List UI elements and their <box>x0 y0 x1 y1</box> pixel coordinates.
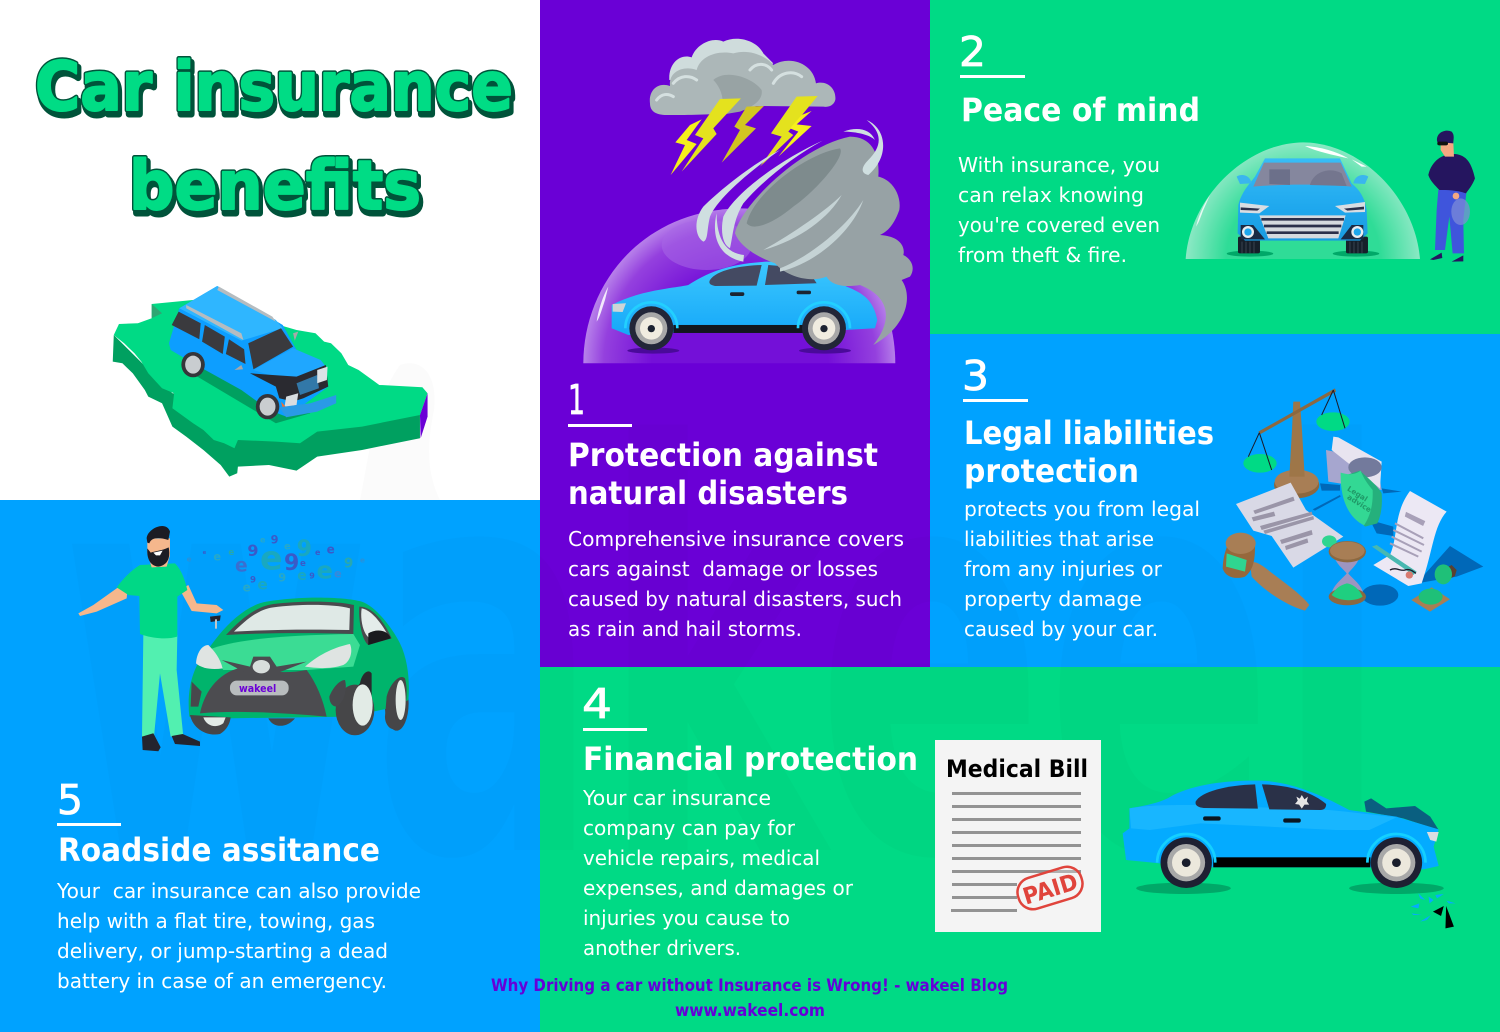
illustration: legal objects: Legal <box>1346 484 1369 504</box>
panel 3: legal liabilities <box>962 352 1483 641</box>
letter cloud: e <box>243 580 251 594</box>
body <box>1123 781 1439 869</box>
title: Car insurance <box>37 52 515 131</box>
letter cloud: 9 <box>250 576 256 586</box>
footer link text: Why Driving a car without Insurance is Wrong! - wakeel Blog <box>491 976 1008 996</box>
windows <box>172 312 245 364</box>
body text <box>582 786 854 960</box>
footer link text <box>491 976 1008 1021</box>
torso <box>117 563 187 638</box>
title: benefits <box>129 147 421 226</box>
letter cloud: e <box>187 555 192 564</box>
illustration: legal objects <box>1223 388 1483 612</box>
illustration: man with keys and green car: wakeel <box>239 682 276 695</box>
letter cloud: e <box>300 559 306 569</box>
body text: company can pay for <box>583 816 796 840</box>
body text: expenses, and damages or <box>583 876 854 900</box>
shadows <box>1227 251 1273 257</box>
heading: Protection against <box>568 436 878 474</box>
number 2: 2 <box>959 28 986 76</box>
body text: Your car insurance can also provide <box>56 879 421 903</box>
body text: you're covered even <box>958 213 1160 237</box>
man legs <box>142 635 183 737</box>
illustration: man with keys and green car <box>78 526 409 751</box>
illustration: storm, tornado and protected car <box>583 39 913 363</box>
heading <box>568 436 878 512</box>
map side <box>113 335 420 477</box>
heading: protection <box>964 452 1139 490</box>
heading: Legal liabilities <box>964 414 1214 452</box>
side window <box>359 607 392 645</box>
footer link text: www.wakeel.com <box>675 1001 825 1021</box>
letter cloud: 9 <box>278 571 286 585</box>
letter cloud: e <box>213 550 221 564</box>
letter cloud: 9 <box>284 551 299 576</box>
body text: from any injuries or <box>964 557 1163 581</box>
grille <box>1259 215 1346 238</box>
body text: as rain and hail storms. <box>568 617 802 641</box>
letter cloud: 9 <box>271 532 279 546</box>
body text: vehicle repairs, medical <box>583 846 820 870</box>
car wheels behind body <box>336 678 374 735</box>
heading: Peace of mind <box>961 91 1200 129</box>
body text: delivery, or jump-starting a dead <box>57 939 388 963</box>
body text: can relax knowing <box>958 183 1144 207</box>
car <box>189 598 409 718</box>
headlights <box>196 645 223 669</box>
title: benefits <box>131 151 423 230</box>
number 4: 4 <box>582 680 612 728</box>
letter cloud: 9 <box>309 571 315 580</box>
cloud <box>650 39 835 115</box>
letter cloud: e <box>257 575 268 593</box>
body text <box>56 879 421 993</box>
illustration: car under dome and thief <box>1186 131 1475 262</box>
book <box>1326 450 1382 490</box>
body text: caused by your car. <box>964 617 1158 641</box>
tornado <box>735 137 913 345</box>
illustration: damaged blue car <box>1123 781 1456 928</box>
stamp <box>1436 565 1457 583</box>
letter cloud: e <box>315 548 321 557</box>
letter cloud: 9 <box>297 537 312 562</box>
body text: cars against damage or losses <box>568 557 878 581</box>
heading <box>964 414 1214 490</box>
mirrors <box>234 332 298 370</box>
hourglass <box>1332 550 1363 597</box>
scales <box>1274 472 1319 498</box>
car <box>612 262 877 335</box>
heading: Roadside assitance <box>58 831 380 869</box>
contract <box>1236 483 1343 568</box>
heading: Financial protection <box>583 740 918 778</box>
letter cloud: e <box>228 548 234 558</box>
letter cloud: e <box>260 538 283 577</box>
body text: liabilities that arise <box>964 527 1154 551</box>
letter <box>1373 491 1447 586</box>
crushed hood <box>1364 798 1439 830</box>
panel 1: natural disasters <box>568 39 913 641</box>
faint watermark stem <box>360 363 440 500</box>
gavel <box>1250 562 1309 611</box>
lightning bolts <box>671 96 818 175</box>
wheels <box>629 306 673 350</box>
icon: Saudi map with crashed SUV <box>113 286 428 477</box>
letter cloud: e <box>327 542 335 556</box>
wheels <box>1161 837 1212 888</box>
dome <box>1186 142 1420 259</box>
arms <box>78 582 128 616</box>
letter cloud: e <box>203 550 207 556</box>
map end <box>420 393 428 438</box>
paid stamp: PAID <box>1020 869 1081 911</box>
wind streaks <box>696 150 780 242</box>
medical bill document: Medical Bill <box>946 755 1088 783</box>
letter cloud: e <box>334 566 342 580</box>
medical bill document <box>935 740 1101 932</box>
thief <box>1428 131 1475 262</box>
number 5: 5 <box>57 776 83 824</box>
panel 5: roadside assistance <box>56 526 421 993</box>
body text: battery in case of an emergency. <box>57 969 387 993</box>
broken glass <box>1433 906 1454 928</box>
dome <box>583 208 895 363</box>
number 1: 1 <box>568 376 585 424</box>
letter cloud: e <box>360 556 365 565</box>
title: Car insurance <box>35 48 513 127</box>
letter cloud <box>187 532 365 594</box>
body text: With insurance, you <box>958 153 1160 177</box>
shield <box>1342 471 1382 527</box>
letter cloud: e <box>317 556 333 584</box>
title: benefits <box>129 147 421 226</box>
grille <box>200 667 327 717</box>
letter cloud: e <box>235 556 248 577</box>
hood <box>253 348 326 377</box>
tyres <box>1238 237 1368 253</box>
front wheels <box>190 715 231 735</box>
panel: title and map <box>35 48 515 500</box>
body text: caused by natural disasters, such <box>568 587 902 611</box>
windshield <box>226 602 354 635</box>
SUV body <box>169 286 328 417</box>
title <box>35 48 515 230</box>
letter cloud: e <box>284 541 291 552</box>
body text <box>958 153 1160 267</box>
body text: injuries you cause to <box>583 906 790 930</box>
title: Car insurance <box>35 48 513 127</box>
letter cloud: 9 <box>344 556 353 571</box>
body text <box>568 527 904 641</box>
keys <box>210 615 221 622</box>
panel 4: financial protection <box>582 680 1456 960</box>
body text: another drivers. <box>583 936 741 960</box>
letter cloud: e <box>297 568 307 584</box>
body <box>1238 158 1368 241</box>
body text: protects you from legal <box>964 497 1200 521</box>
body text <box>964 497 1200 641</box>
body text: Your car insurance <box>582 786 771 810</box>
body text: from theft & fire. <box>958 243 1127 267</box>
letter cloud: e <box>260 536 266 545</box>
car shadow <box>186 363 310 423</box>
body text: help with a flat tire, towing, gas <box>57 909 375 933</box>
map top <box>114 300 428 448</box>
letter cloud: 9 <box>247 541 258 560</box>
wheels <box>181 352 205 377</box>
fog lights <box>1241 225 1363 239</box>
head <box>147 538 170 567</box>
illustration: legal objects: advice <box>1346 492 1373 514</box>
body text: property damage <box>964 587 1142 611</box>
windows <box>1196 784 1258 809</box>
heading: natural disasters <box>568 474 848 512</box>
panel 2: peace of mind <box>958 28 1475 267</box>
body text: Comprehensive insurance covers <box>568 527 904 551</box>
number 3: 3 <box>962 352 989 400</box>
shadows <box>1313 483 1483 583</box>
